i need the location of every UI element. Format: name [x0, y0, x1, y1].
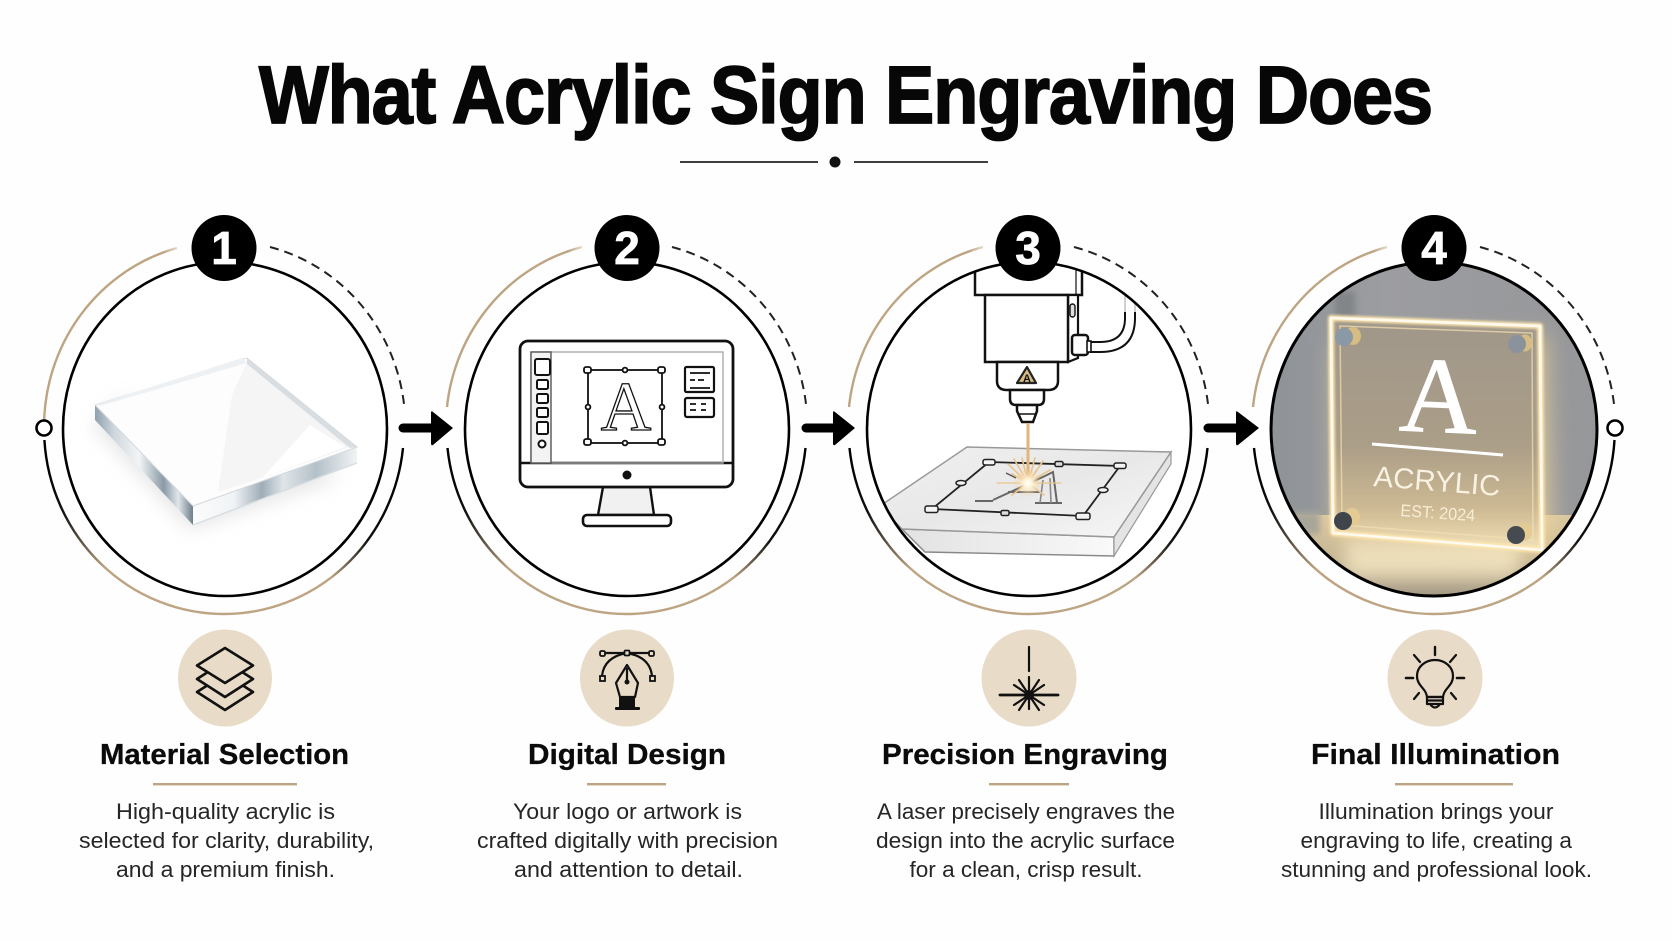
text: final illumination description: engraving to life, creating a — [1300, 828, 1572, 853]
arrow 3 to 4 — [1208, 411, 1259, 445]
text: material selection description: High-quality acrylic is — [116, 799, 335, 824]
outer progress ring 3 — [849, 247, 1208, 614]
panel: step 2 digital design — [447, 215, 806, 614]
laser beam and spark — [997, 423, 1061, 497]
accent line 4 — [1395, 783, 1513, 785]
illustration: illuminated acrylic sign — [1270, 260, 1600, 600]
number badge 4 — [1402, 215, 1466, 281]
acrylic sign plate: ACRYLIC — [1372, 461, 1502, 503]
acrylic sign plate — [1331, 318, 1542, 550]
inner ring background 3 — [867, 262, 1191, 596]
text: digital design description: and attention to detail. — [514, 857, 743, 882]
icon: stacked layers — [178, 630, 272, 726]
title: What Acrylic Sign Engraving Does — [259, 50, 1432, 141]
text: final illumination description — [1281, 799, 1592, 882]
text: digital design description: crafted digitally with precision — [477, 828, 778, 853]
title divider — [680, 156, 988, 168]
accent line 1 — [153, 783, 297, 785]
text: final illumination description: stunning and professional look. — [1281, 857, 1592, 882]
icon: laser warning triangle: A — [1023, 373, 1031, 385]
arrow 2 to 3 — [806, 411, 855, 445]
icon: laser spark — [982, 630, 1076, 726]
panel: step 1 material selection — [36, 215, 404, 614]
text: precision engraving description: A laser precisely engraves the — [877, 799, 1175, 824]
outer progress ring 2 — [447, 247, 806, 614]
illustration: laser engraving head — [975, 262, 1135, 422]
icon: light bulb — [1388, 630, 1482, 726]
text: precision engraving description: design into the acrylic surface — [876, 828, 1175, 853]
text: digital design description — [477, 799, 778, 882]
inner ring 3 — [867, 262, 1191, 596]
icon: pen tool — [580, 630, 674, 726]
outer progress ring 1 — [36, 247, 404, 614]
number badge 2: 2 — [614, 222, 640, 274]
heading: precision engraving: Precision Engraving — [882, 739, 1168, 771]
text: material selection description: and a premium finish. — [116, 857, 335, 882]
panel: step 3 precision engraving — [849, 215, 1208, 614]
outer progress ring 4 — [1253, 247, 1622, 614]
illustration: desktop monitor with design software — [520, 341, 733, 526]
illustration: acrylic slab being engraved — [880, 447, 1171, 556]
number badge 3: 3 — [1015, 222, 1041, 274]
text: final illumination description: Illumination brings your — [1318, 799, 1554, 824]
accent line 2 — [587, 783, 666, 785]
text: material selection description — [79, 799, 374, 882]
number badge 3 — [996, 215, 1060, 281]
acrylic sign plate: A — [1397, 335, 1480, 458]
text: precision engraving description — [876, 799, 1175, 882]
panel: step 4 final illumination — [1253, 215, 1622, 614]
icon: laser warning triangle — [1017, 367, 1036, 385]
inner ring 1 — [63, 262, 387, 596]
inner ring 2 — [465, 262, 789, 596]
number badge 4: 4 — [1421, 222, 1447, 274]
inner ring 4 — [1271, 262, 1597, 596]
illustration: clear acrylic block — [92, 358, 357, 530]
text: material selection description: selected for clarity, durability, — [79, 828, 374, 853]
number badge 1: 1 — [211, 222, 237, 274]
text: digital design description: Your logo or artwork is — [513, 799, 742, 824]
heading: material selection: Material Selection — [100, 739, 349, 771]
arrow 1 to 2 — [403, 411, 453, 445]
acrylic sign plate: EST: 2024 — [1400, 501, 1476, 525]
text: precision engraving description: for a clean, crisp result. — [910, 857, 1142, 882]
number badge 2 — [594, 215, 660, 281]
heading: digital design: Digital Design — [528, 739, 726, 771]
accent line 3 — [989, 783, 1069, 785]
heading: final illumination: Final Illumination — [1311, 739, 1560, 771]
illustration: desktop monitor with design software: A — [601, 369, 652, 446]
number badge 1 — [192, 215, 256, 281]
